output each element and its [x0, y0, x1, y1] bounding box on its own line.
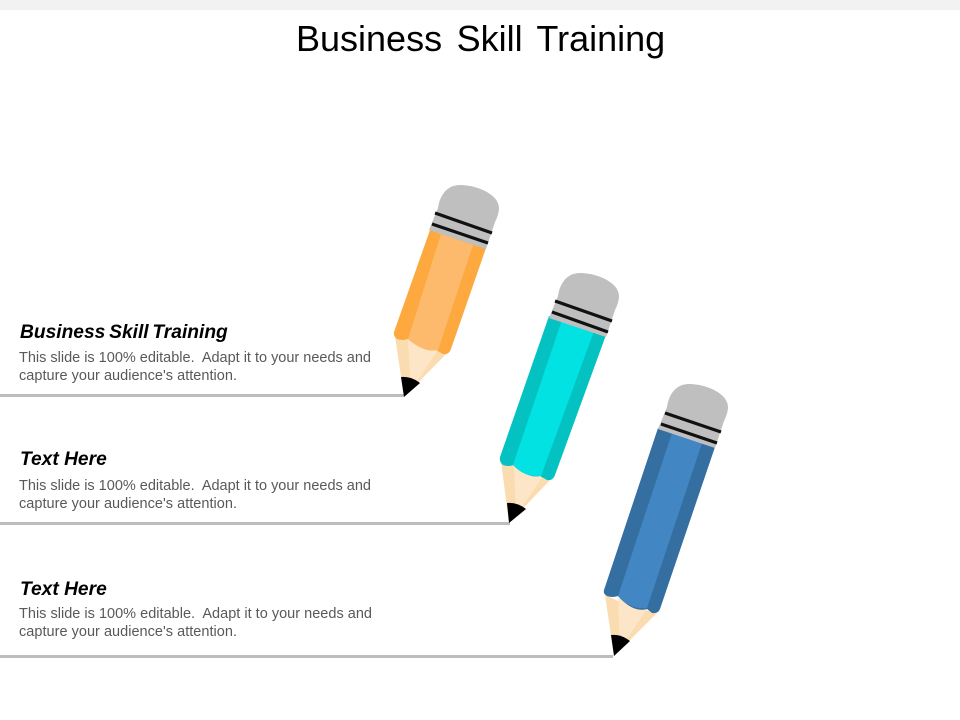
icon: orange pencil	[394, 185, 499, 397]
text block: text here 3	[19, 579, 372, 640]
icon: blue pencil	[604, 384, 728, 656]
text block: text here 3: This slide is 100% editable. Adapt it to your needs and	[19, 606, 372, 622]
leader line 2	[0, 522, 510, 525]
text block: text here 2: This slide is 100% editable. Adapt it to your needs and	[19, 478, 371, 494]
text block: business skill training: Business Skill Training	[20, 322, 228, 343]
text block: text here 3: capture your audience's attention.	[19, 624, 237, 640]
text block: business skill training: capture your audience's attention.	[19, 368, 237, 384]
text block: text here 2: capture your audience's attention.	[19, 496, 237, 512]
leader line 3	[0, 655, 613, 658]
text block: text here 3: Text Here	[20, 579, 107, 600]
text block: business skill training	[19, 322, 371, 384]
text block: text here 2	[19, 449, 371, 512]
title: Business Skill Training	[296, 18, 665, 59]
icon: teal pencil	[500, 273, 619, 523]
text block: text here 2: Text Here	[20, 449, 107, 470]
leader line 1	[0, 394, 404, 397]
text block: business skill training: This slide is 100% editable. Adapt it to your needs and	[19, 350, 371, 366]
